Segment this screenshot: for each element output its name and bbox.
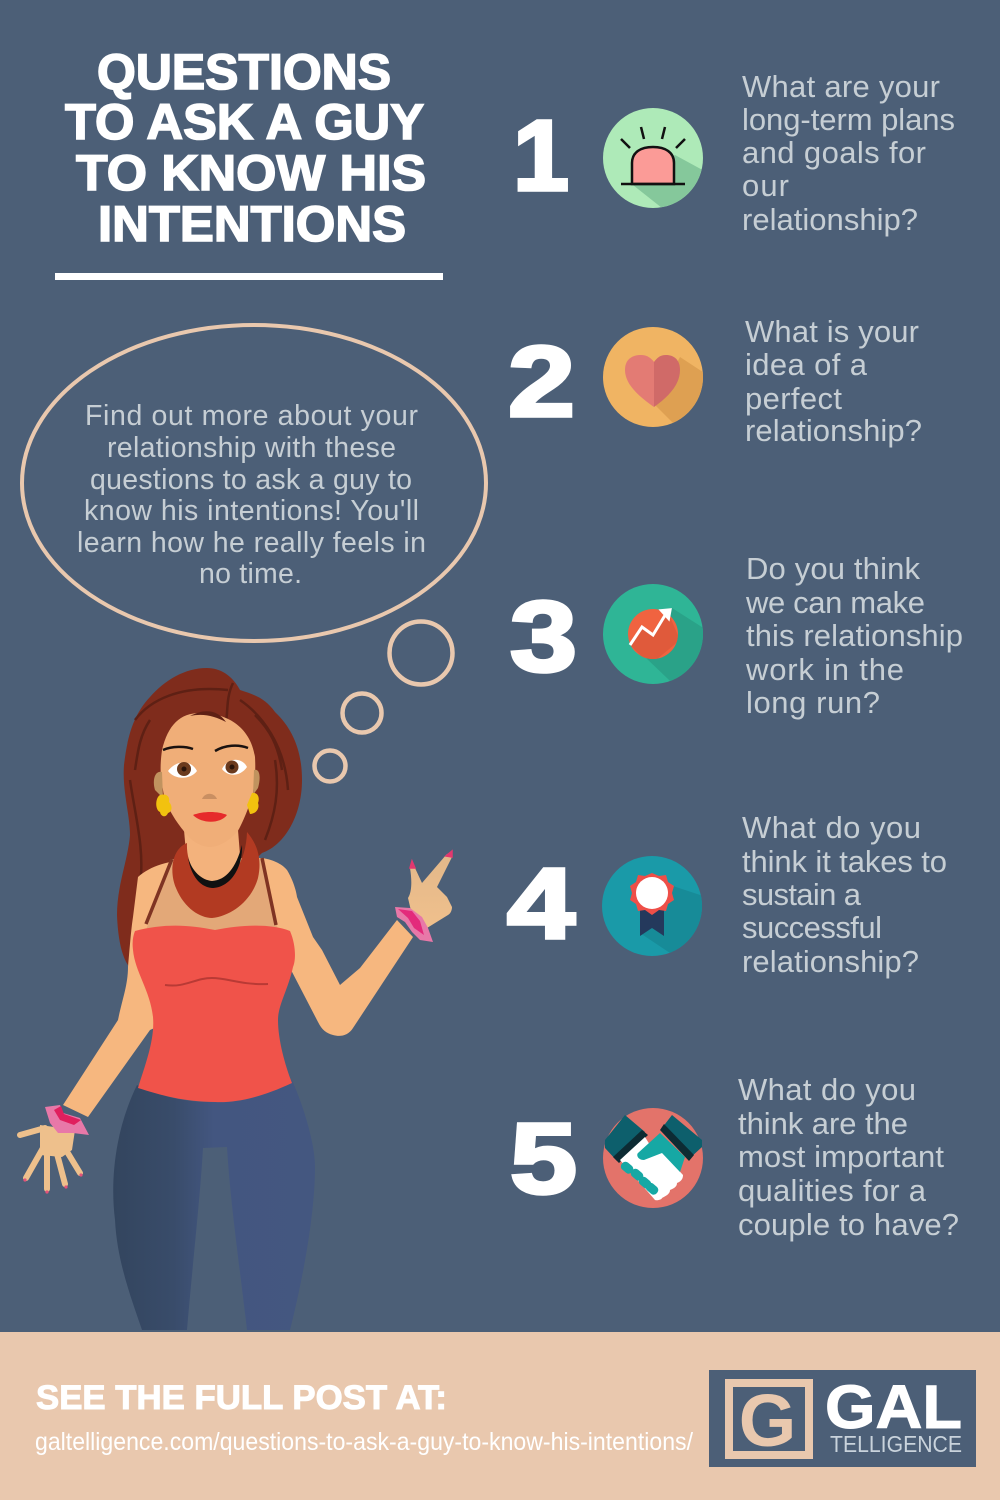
logo G: G [739, 1379, 796, 1462]
bracelet right [395, 907, 433, 942]
title [65, 44, 426, 252]
footer band [0, 1332, 1000, 1500]
top straps [146, 858, 276, 925]
white hand [620, 1137, 683, 1200]
question 3: long run? [746, 685, 880, 720]
item 1 [513, 69, 955, 240]
left hand [20, 1125, 83, 1194]
question 2: What is your [745, 314, 919, 349]
question 4: What do you [742, 810, 921, 845]
question 2: idea of a [745, 347, 868, 382]
question 4: relationship? [742, 944, 919, 979]
question 2 [745, 314, 922, 448]
icon: siren [603, 108, 703, 208]
question 4: successful [742, 910, 882, 945]
title underline [55, 273, 443, 280]
hair shading [130, 683, 288, 885]
bubble text [77, 400, 426, 590]
question 5 [738, 1072, 959, 1242]
question 5: What do you [738, 1072, 916, 1107]
item 5 [510, 1072, 959, 1242]
ears [154, 770, 260, 798]
footer heading: SEE THE FULL POST AT: [36, 1379, 447, 1417]
number 3: 3 [510, 581, 577, 693]
hair [117, 668, 302, 968]
thought bubble [22, 325, 486, 641]
question 1: and goals for [742, 135, 926, 170]
scarf [172, 832, 260, 918]
thought circles [314, 622, 452, 782]
bubble text: questions to ask a guy to [90, 464, 412, 496]
question 3: work in the [745, 652, 904, 687]
pointing hand [408, 851, 452, 928]
body and arms [63, 858, 413, 1117]
number 5: 5 [510, 1103, 577, 1215]
question 4: think it takes to [742, 844, 947, 879]
question 3: this relationship [746, 618, 963, 653]
icon: award ribbon [602, 856, 702, 956]
question 3 [745, 551, 963, 720]
question 1: long-term plans [742, 102, 955, 137]
bubble text: Find out more about your [85, 400, 418, 432]
eyebrows [163, 746, 248, 751]
question 5: most important [738, 1139, 944, 1174]
icon: handshake [603, 1108, 703, 1208]
logo TELLIGENCE: TELLIGENCE [830, 1431, 962, 1457]
question 1: What are your [742, 69, 940, 104]
question 5: think are the [738, 1106, 908, 1141]
bubble text: no time. [199, 558, 302, 590]
question 2: perfect [745, 381, 842, 416]
nose [202, 794, 217, 799]
item 3 [510, 551, 963, 720]
teal hand [637, 1133, 685, 1172]
logo GAL: GAL [825, 1373, 962, 1441]
question 4: sustain a [742, 877, 862, 912]
title: QUESTIONS [97, 44, 391, 100]
question 3: Do you think [746, 551, 920, 586]
title: TO KNOW HIS [76, 145, 426, 201]
neck [184, 830, 242, 887]
question 3: we can make [745, 585, 925, 620]
question 1 [742, 69, 955, 237]
bubble outline [22, 325, 486, 641]
question 5: qualities for a [738, 1173, 927, 1208]
item 2 [508, 314, 922, 450]
item 4 [507, 810, 947, 979]
fingers [619, 1160, 660, 1196]
bracelet left [45, 1105, 89, 1135]
question 5: couple to have? [738, 1207, 959, 1242]
bubble text: learn how he really feels in [77, 527, 426, 559]
number 1: 1 [513, 100, 569, 212]
icon: heart [603, 327, 703, 427]
scarf shadow [188, 845, 242, 888]
bubble text: relationship with these [107, 432, 396, 464]
cuffs [605, 1115, 645, 1161]
title: INTENTIONS [98, 196, 406, 252]
woman illustration [20, 668, 452, 1330]
footer url: galtelligence.com/questions-to-ask-a-guy-to-know-his-intentions/ [35, 1428, 693, 1456]
logo square [729, 1383, 809, 1455]
number 2: 2 [508, 326, 575, 438]
lips [193, 812, 227, 822]
question 1: relationship? [742, 202, 918, 237]
question 1: our [742, 168, 789, 203]
chest [146, 858, 278, 930]
question 4 [742, 810, 947, 979]
title: TO ASK A GUY [65, 94, 424, 150]
forehead shadow [190, 711, 226, 722]
face [161, 713, 255, 847]
red top [133, 926, 295, 1102]
number 4: 4 [507, 848, 575, 960]
earrings [156, 793, 259, 816]
top fold [165, 978, 268, 986]
icon: growth chart [603, 584, 703, 684]
question 2: relationship? [745, 413, 922, 448]
jeans [113, 1080, 315, 1330]
eyes [168, 760, 247, 778]
logo [709, 1370, 976, 1467]
bubble text: know his intentions! You'll [84, 495, 419, 527]
